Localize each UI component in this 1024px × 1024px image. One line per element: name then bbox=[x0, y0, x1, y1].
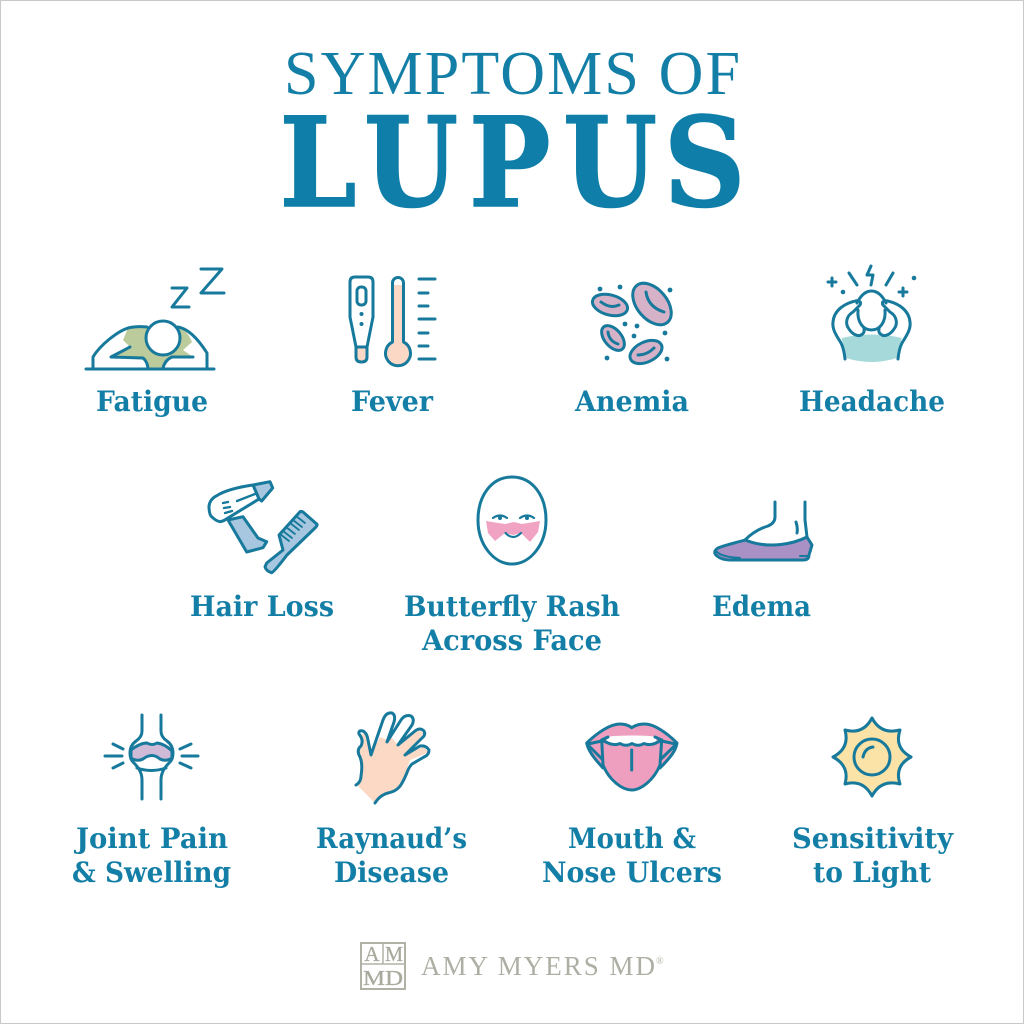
label: raynaud's disease: Raynaud’s bbox=[316, 822, 467, 855]
label: butterfly rash across face bbox=[404, 590, 620, 657]
icon: face with rash bbox=[478, 477, 546, 564]
logo wordmark: AMY MYERS MD bbox=[421, 951, 655, 981]
title bbox=[280, 40, 746, 236]
logo monogram box: MD bbox=[363, 966, 403, 990]
icon: hair dryer and comb bbox=[209, 482, 317, 573]
symptom: fever bbox=[350, 277, 435, 418]
symptom: anemia bbox=[574, 276, 689, 418]
title line: symptoms of: SYMPTOMS OF bbox=[284, 40, 740, 108]
icon: person holding head bbox=[828, 266, 916, 362]
icon: swollen foot in shoe bbox=[715, 502, 812, 560]
icon: mouth with tongue bbox=[587, 724, 677, 790]
label: raynaud's disease bbox=[316, 822, 467, 889]
label: anemia: Anemia bbox=[574, 385, 689, 418]
symptom: edema bbox=[712, 502, 812, 623]
icon: sleeping person bbox=[86, 269, 224, 369]
icon: sun bbox=[833, 718, 911, 796]
label: joint pain and swelling: & Swelling bbox=[72, 856, 231, 889]
label: sensitivity to light: Sensitivity bbox=[792, 822, 954, 855]
title line: lupus: P bbox=[469, 91, 550, 236]
logo monogram box: M bbox=[385, 942, 403, 966]
label: fatigue: Fatigue bbox=[96, 385, 208, 418]
icon: knee joint bbox=[105, 715, 198, 799]
logo monogram box: A bbox=[364, 942, 380, 966]
label: hair loss: Hair Loss bbox=[190, 590, 334, 623]
label: sensitivity to light: to Light bbox=[813, 856, 931, 889]
label: sensitivity to light bbox=[792, 822, 954, 889]
symptom: hair loss bbox=[190, 482, 334, 623]
title line: lupus: S bbox=[664, 91, 746, 236]
title line: lupus: L bbox=[280, 91, 356, 236]
symptom: mouth and nose ulcers bbox=[542, 724, 722, 889]
title line: lupus: U bbox=[563, 91, 657, 236]
label: joint pain and swelling: Joint Pain bbox=[73, 822, 228, 855]
label: fever: Fever bbox=[351, 385, 434, 418]
symptom: raynaud's disease bbox=[316, 713, 467, 889]
symptom: joint pain bbox=[72, 715, 231, 889]
icon: thermometers bbox=[350, 277, 435, 366]
symptom: butterfly rash bbox=[404, 477, 620, 657]
registered mark: ® bbox=[656, 956, 664, 967]
label: mouth and nose ulcers: Mouth & bbox=[568, 822, 696, 855]
symptom: sensitivity to light bbox=[792, 718, 954, 889]
label: butterfly rash across face: Across Face bbox=[421, 624, 602, 657]
symptom: headache bbox=[799, 266, 945, 418]
label: butterfly rash across face: Butterfly Rash bbox=[404, 590, 620, 623]
title line: lupus: U bbox=[364, 91, 458, 236]
icon: blood cells bbox=[590, 276, 679, 368]
label: headache: Headache bbox=[799, 385, 945, 418]
label: raynaud's disease: Disease bbox=[334, 856, 449, 889]
label: edema: Edema bbox=[712, 590, 811, 623]
label: joint pain and swelling bbox=[72, 822, 231, 889]
symptom: fatigue bbox=[86, 269, 224, 418]
footer logo bbox=[361, 942, 664, 990]
label: mouth and nose ulcers: Nose Ulcers bbox=[542, 856, 722, 889]
logo monogram box bbox=[361, 942, 405, 990]
title line: lupus bbox=[280, 91, 746, 236]
icon: hand bbox=[356, 713, 429, 803]
label: mouth and nose ulcers bbox=[542, 822, 722, 889]
